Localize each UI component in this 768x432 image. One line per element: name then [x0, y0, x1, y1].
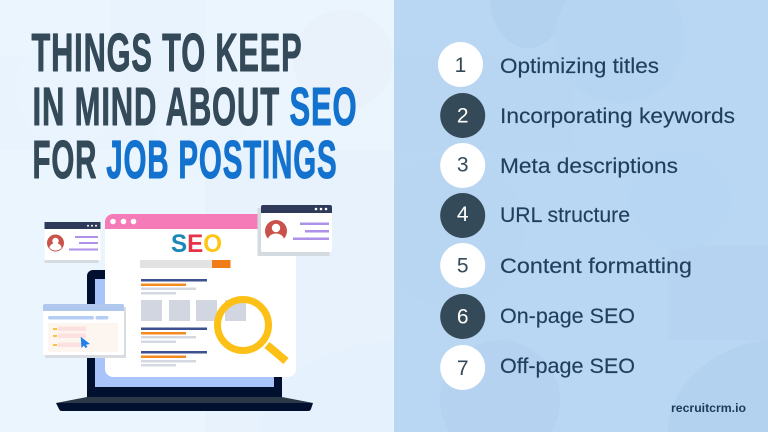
list item 2: 2 — [457, 104, 469, 128]
list item 3: 3 — [457, 154, 469, 176]
search result 2 — [141, 328, 207, 343]
icon: magnifying glass — [218, 300, 286, 361]
list item 5: 5 — [457, 254, 469, 278]
search bar — [140, 260, 230, 268]
icon: cursor — [81, 337, 90, 348]
illustration: laptop with SEO page — [43, 205, 332, 411]
list item 1: Optimizing titles — [500, 55, 659, 78]
list item 2 — [440, 93, 735, 138]
list item 1 — [438, 42, 659, 87]
left profile card — [44, 222, 100, 263]
title: FOR JOB POSTINGS — [32, 130, 338, 190]
SEO browser window — [105, 214, 296, 377]
list item 7 — [440, 345, 635, 390]
title: THINGS TO KEEP — [32, 23, 302, 83]
list item 4 — [440, 193, 630, 238]
list item 6 — [440, 294, 635, 339]
list item 4: 4 — [457, 203, 469, 226]
list item 7: Off-page SEO — [500, 355, 635, 378]
search result 1 — [141, 279, 207, 294]
right profile card — [258, 205, 332, 256]
laptop — [56, 270, 313, 411]
right background — [394, 0, 768, 432]
list item 5: Content formatting — [500, 255, 692, 278]
floating form card — [43, 304, 126, 358]
title: IN MIND ABOUT SEO — [32, 77, 358, 137]
image thumbnails — [141, 300, 246, 321]
list item 1: 1 — [455, 54, 466, 77]
list item 3: Meta descriptions — [500, 155, 678, 178]
list item 6: 6 — [457, 306, 469, 328]
brand url: recruitcrm.io — [671, 403, 746, 415]
list item 6: On-page SEO — [500, 305, 635, 328]
list item 2: Incorporating keywords — [500, 105, 735, 128]
list item 3 — [440, 143, 678, 188]
search result 3 — [141, 351, 207, 366]
list item 4: URL structure — [500, 204, 630, 227]
SEO logo: SEO — [171, 230, 222, 258]
list item 7: 7 — [457, 357, 469, 380]
list item 5 — [440, 243, 692, 288]
left background — [0, 0, 394, 432]
title — [32, 23, 358, 190]
